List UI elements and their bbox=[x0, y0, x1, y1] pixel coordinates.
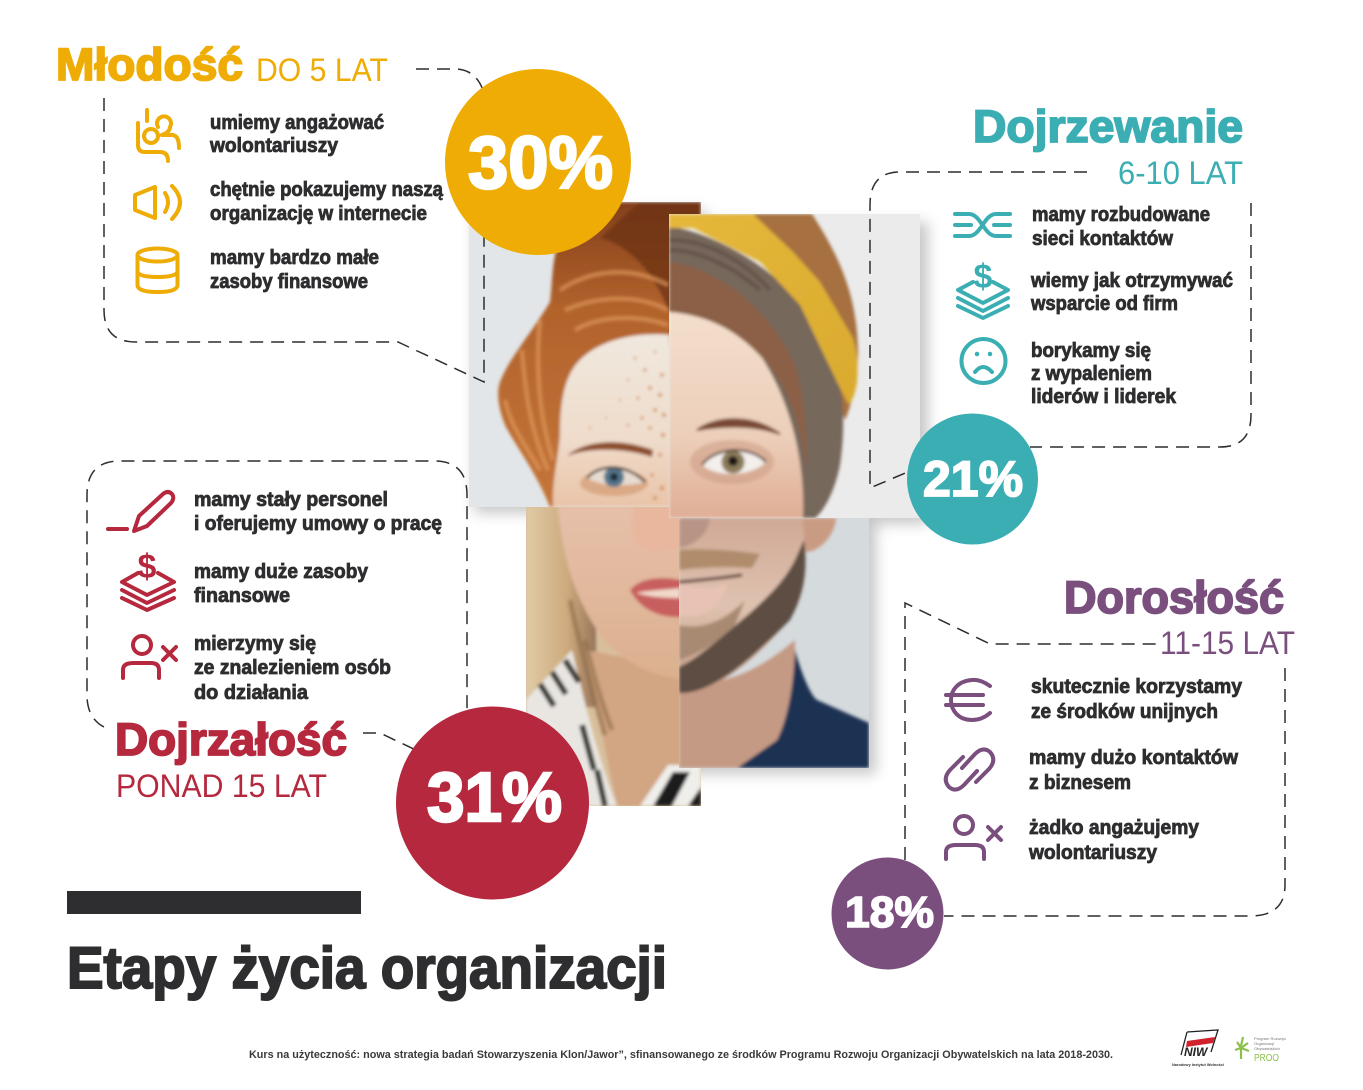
neck bbox=[679, 640, 795, 768]
heading: Młodość: Młodość bbox=[56, 39, 243, 90]
text: borykamy się: liderów i liderek bbox=[1031, 386, 1177, 408]
icon: person with cross red bbox=[123, 636, 176, 678]
text: chętnie pokazujemy: chętnie pokazujemy naszą bbox=[210, 179, 444, 201]
text: mierzymy się: do działania bbox=[194, 682, 309, 704]
logo: PROO: Organizacji bbox=[1254, 1041, 1274, 1046]
photo: top right face bbox=[669, 214, 920, 518]
photo shadows bbox=[474, 210, 928, 774]
eyebrow left bbox=[567, 442, 653, 457]
badge: 31%: 31% bbox=[427, 758, 562, 836]
eye left bbox=[587, 469, 645, 485]
icon: pencil bbox=[108, 492, 173, 531]
eye right bbox=[702, 451, 766, 474]
icon: money stack red bbox=[122, 548, 174, 610]
logo: NIW: Narodowy Instytut Wolności bbox=[1172, 1062, 1224, 1067]
icon: money stack red: $ bbox=[138, 548, 157, 586]
logo: NIW bbox=[1172, 1030, 1224, 1067]
grey brown hair bbox=[669, 226, 843, 518]
logo: PROO bbox=[1235, 1036, 1286, 1064]
text: borykamy się bbox=[1031, 340, 1177, 408]
text: skutecznie korzystamy: skutecznie korzystamy bbox=[1031, 676, 1243, 698]
text: umiemy angażować bbox=[209, 112, 384, 157]
icon: person with cross purple bbox=[946, 816, 1001, 859]
icon: database bbox=[138, 248, 178, 292]
eye shadow bbox=[690, 440, 774, 484]
badge: 30% bbox=[445, 69, 631, 255]
logo: PROO: PROO bbox=[1254, 1053, 1279, 1064]
text: mamy dużo kontaktów bbox=[1029, 747, 1238, 794]
heading: Dorosłość bbox=[1064, 572, 1295, 661]
heading: Dojrzewanie: 6-10 LAT bbox=[1118, 155, 1243, 191]
badge: 21%: 21% bbox=[923, 451, 1023, 507]
text: mierzymy się: ze znalezieniem osób bbox=[194, 657, 391, 679]
mouth bbox=[679, 575, 742, 582]
text: mamy stały personel bbox=[194, 489, 442, 535]
heading: Dojrzałość bbox=[115, 714, 347, 804]
text: skutecznie korzystamy: ze środków unijnych bbox=[1031, 701, 1218, 723]
beard bbox=[679, 540, 805, 693]
lips bbox=[630, 578, 682, 617]
text: żadko angażujemy: żadko angażujemy bbox=[1029, 817, 1200, 839]
text: mamy rozbudowane bbox=[1032, 204, 1210, 250]
text: mamy bardzo małe: mamy bardzo małe bbox=[210, 247, 379, 269]
badge: 18% bbox=[832, 858, 944, 970]
heading: Młodość: DO 5 LAT bbox=[256, 52, 388, 88]
title: Etapy życia organizacji bbox=[67, 936, 667, 1001]
text: borykamy się: z wypaleniem bbox=[1031, 363, 1152, 385]
text: mierzymy się: mierzymy się bbox=[194, 633, 316, 655]
logo: NIW: NIW bbox=[1184, 1045, 1209, 1059]
text: mamy dużo kontaktów: mamy dużo kontaktów bbox=[1029, 747, 1238, 769]
icon: money stack teal: $ bbox=[974, 258, 993, 296]
text: umiemy angażować: wolontariuszy bbox=[209, 135, 339, 157]
photo: bottom left face bbox=[526, 507, 701, 806]
icon: money stack teal bbox=[958, 258, 1008, 318]
text: wiemy jak bbox=[1030, 270, 1233, 315]
text: chętnie pokazujemy bbox=[210, 179, 444, 225]
text: mamy bardzo małe bbox=[210, 247, 379, 293]
eyebrow right bbox=[697, 419, 780, 434]
badge: 31% bbox=[396, 706, 589, 900]
text: żadko angażujemy bbox=[1028, 817, 1200, 864]
nose bbox=[679, 518, 710, 548]
panel: Dojrzałość outline bbox=[87, 461, 467, 751]
text: mierzymy się bbox=[194, 633, 391, 704]
forehead skin bbox=[669, 312, 803, 518]
hair strands over neck bbox=[570, 600, 612, 735]
shirt right bbox=[640, 765, 701, 806]
hair behind band bbox=[750, 214, 858, 420]
photo: top left face bbox=[469, 202, 701, 507]
text: mamy dużo kontaktów: z biznesem bbox=[1029, 772, 1131, 794]
text: mamy bardzo małe: zasoby finansowe bbox=[210, 271, 368, 293]
heading: Dorosłość: Dorosłość bbox=[1064, 572, 1284, 623]
text: żadko angażujemy: wolontariuszy bbox=[1028, 842, 1158, 864]
forehead and cheek skin bbox=[553, 334, 670, 507]
badge: 21% bbox=[907, 414, 1038, 544]
heading: Dojrzałość: PONAD 15 LAT bbox=[116, 768, 327, 804]
text: mamy rozbudowane: sieci kontaktów bbox=[1032, 228, 1173, 250]
panel: Dorosłość outline bbox=[905, 603, 1285, 916]
heading: Dorosłość: 11-15 LAT bbox=[1160, 625, 1295, 661]
text: mamy duże zasoby: mamy duże zasoby bbox=[194, 561, 369, 583]
neck bbox=[586, 650, 679, 806]
icon: hands and person bbox=[138, 110, 179, 161]
heading: Dojrzewanie: Dojrzewanie bbox=[973, 101, 1243, 152]
text: chętnie pokazujemy: organizację w internecie bbox=[210, 203, 427, 225]
icon: network bbox=[955, 214, 1010, 236]
icon: speaker bbox=[135, 186, 180, 219]
heading: Dojrzewanie bbox=[973, 101, 1243, 191]
title bar bbox=[67, 891, 361, 914]
badge: 30%: 30% bbox=[468, 121, 613, 204]
text: borykamy się: borykamy się bbox=[1031, 340, 1151, 362]
text: mamy stały personel: i oferujemy umowy o pracę bbox=[194, 513, 442, 535]
freckles bbox=[589, 351, 666, 500]
heading: Dojrzałość: Dojrzałość bbox=[115, 714, 347, 765]
blond hair bbox=[526, 507, 596, 707]
face bbox=[679, 518, 806, 692]
icon: chain link bbox=[946, 749, 993, 790]
panel: Młodość outline bbox=[104, 69, 484, 382]
striped shirt bbox=[526, 650, 617, 806]
yellow headband bbox=[669, 214, 858, 404]
text: skutecznie korzystamy bbox=[1031, 676, 1243, 723]
hair top left bbox=[498, 202, 701, 507]
footer note: Kurs na użyteczność: nowa strategia badań Stowarzyszenia Klon/Jawor”, sfinansowanego ze środków Programu Rozwoju Organizacji Obywatelskich na lata 2018-2030. bbox=[249, 1049, 1113, 1061]
navy shirt bbox=[737, 643, 869, 768]
beard patch bbox=[679, 600, 745, 660]
text: umiemy angażować: umiemy angażować bbox=[210, 112, 384, 134]
nose bbox=[633, 508, 679, 530]
logo: PROO: Obywatelskich bbox=[1254, 1046, 1280, 1051]
face bbox=[558, 507, 690, 680]
icon: sad face bbox=[962, 339, 1006, 383]
text: mamy stały personel: mamy stały personel bbox=[194, 489, 388, 511]
heading: Młodość bbox=[56, 39, 388, 90]
logo: PROO: Program Rozwoju bbox=[1254, 1036, 1286, 1041]
text: mamy duże zasoby: finansowe bbox=[194, 585, 290, 607]
panel: Dojrzewanie outline bbox=[870, 172, 1251, 488]
photo: bottom right face bbox=[679, 518, 869, 768]
ear bbox=[803, 518, 836, 552]
text: wiemy jak: wiemy jak otrzymywać bbox=[1030, 270, 1233, 292]
badge: 18%: 18% bbox=[845, 888, 934, 937]
text: mamy rozbudowane: mamy rozbudowane bbox=[1032, 204, 1210, 226]
icon: euro bbox=[946, 680, 990, 720]
eye socket bbox=[580, 470, 648, 496]
text: wiemy jak: wsparcie od firm bbox=[1030, 293, 1178, 315]
text: mamy duże zasoby bbox=[194, 561, 369, 607]
